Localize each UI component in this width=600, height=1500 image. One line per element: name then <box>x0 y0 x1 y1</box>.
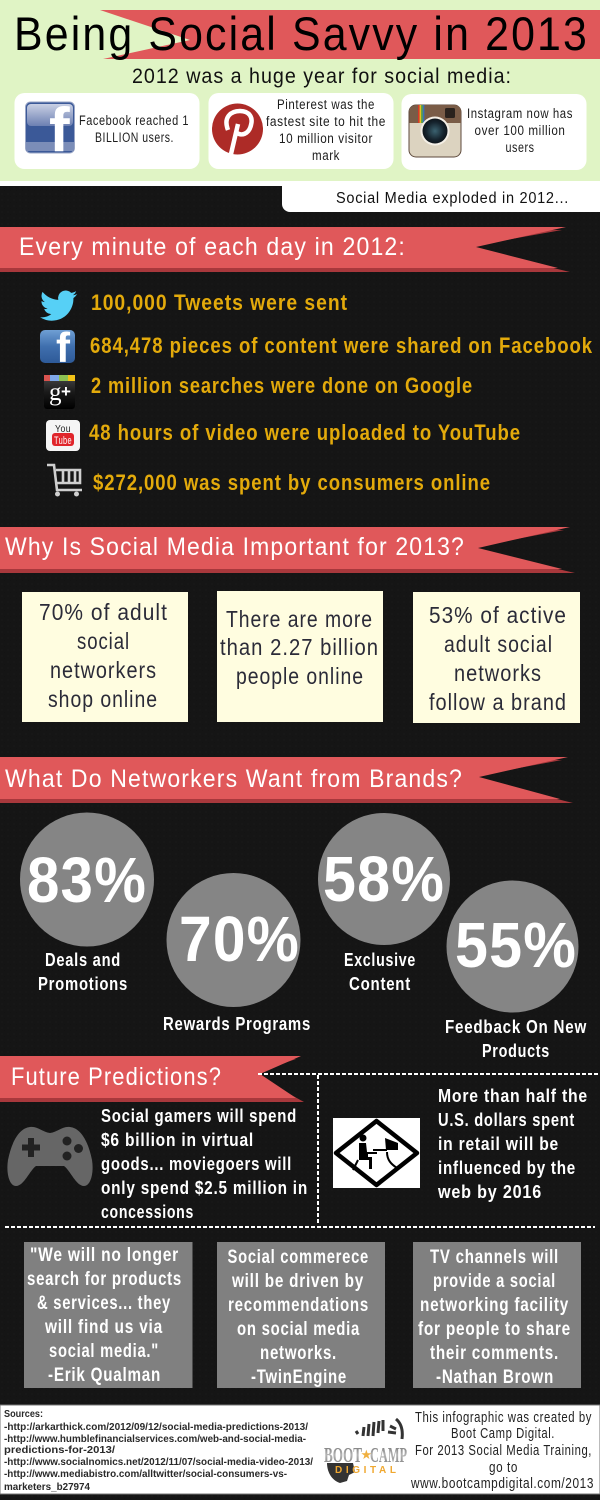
text: sources: -http://www.mediabistro.com/alltwitter/social-consumers-vs- <box>4 1469 287 1480</box>
box: follow a brand: adult social <box>444 631 553 657</box>
panel: importance boxes <box>22 591 580 723</box>
text: gamers: only spend $2.5 million in <box>101 1177 308 1198</box>
stat: tweets: 100,000 Tweets were sent <box>91 290 348 315</box>
quote: Erik Qualman: "We will no longer <box>30 1245 179 1266</box>
icon: youtube <box>46 420 80 451</box>
card: Pinterest: Pinterest was the <box>277 97 375 112</box>
text: gamers: Social gamers will spend <box>101 1105 297 1126</box>
card: Facebook: f <box>49 96 70 165</box>
logo: Boot Camp Digital: ★ <box>360 1447 372 1462</box>
title ribbon <box>100 10 600 59</box>
icon: google plus <box>44 375 75 409</box>
stat: 83% deals: Deals and <box>45 949 121 970</box>
box: follow a brand: follow a brand <box>429 689 567 715</box>
stat: 55% feedback: 55% <box>455 909 577 981</box>
card: Pinterest <box>208 93 394 169</box>
banner: Future Predictions <box>0 1056 304 1102</box>
text: sources: marketers_b27974 <box>4 1482 90 1493</box>
card: Facebook <box>14 93 200 169</box>
text: credits: go to <box>489 1460 518 1476</box>
quote: Erik Qualman: search for products <box>27 1269 182 1290</box>
logo: Boot Camp Digital: BOOT <box>324 1443 362 1467</box>
icon: twitter <box>40 290 77 321</box>
stat: 83% deals: 83% <box>27 844 147 916</box>
banner: What Do Networkers Want: What Do Networkers Want from Brands? <box>5 765 463 793</box>
stat: google: 2 million searches were done on Google <box>91 373 473 398</box>
quote: TwinEngine: Social commerece <box>228 1247 369 1268</box>
box: follow a brand: 53% of active <box>429 602 567 628</box>
text: sources: -http://www.humblefinancialservices.com/web-and-social-media- <box>4 1434 306 1445</box>
icon: google plus: + <box>61 382 71 401</box>
card: Facebook: BILLION users. <box>95 130 174 145</box>
panel: percent circles <box>20 812 587 1061</box>
quote: Nathan Brown <box>413 1242 581 1388</box>
card: Instagram: over 100 million <box>474 123 566 138</box>
quote: Erik Qualman: will find us via <box>44 1317 163 1338</box>
quote: TwinEngine: networks. <box>260 1343 337 1364</box>
text: gamers: goods... moviegoers will <box>101 1153 292 1174</box>
quote: Nathan Brown: their comments. <box>430 1343 559 1364</box>
panel: header <box>0 0 600 186</box>
text: retail: web by 2016 <box>437 1181 542 1202</box>
banner: Future Predictions: Future Predictions? <box>11 1063 222 1091</box>
stat: 58% exclusive <box>318 813 450 994</box>
panel: quotes <box>24 1242 581 1388</box>
text: retail <box>437 1085 588 1202</box>
stat: 70% rewards: 70% <box>179 903 300 975</box>
tab: Social Media exploded <box>282 181 600 212</box>
stat: 55% feedback <box>445 880 587 1061</box>
card: Instagram: Instagram now has <box>467 106 573 121</box>
stat: online spend: $272,000 was spent by consumers online <box>93 470 491 495</box>
box: shop online <box>22 592 188 722</box>
stat: 83% deals <box>20 812 154 994</box>
box: 2.27 billion online: people online <box>236 663 364 689</box>
banner: Every minute <box>0 227 570 272</box>
banner: Why Is Social Media Important: Why Is Social Media Important for 2013? <box>5 533 465 561</box>
box: 2.27 billion online <box>217 591 383 722</box>
stat: 83% deals: Promotions <box>38 973 128 994</box>
icon: computer user sign <box>333 1118 420 1188</box>
text: retail: in retail will be <box>438 1133 559 1154</box>
icon: youtube: Tube <box>54 435 72 447</box>
card: Pinterest: mark <box>312 148 340 163</box>
text: sources: -http://arkarthick.com/2012/09/12/social-media-predictions-2013/ <box>4 1422 308 1433</box>
panel: footer <box>0 1405 600 1494</box>
quote: Erik Qualman: -Erik Qualman <box>48 1365 161 1386</box>
card: Pinterest: 10 million visitor <box>279 131 373 146</box>
stat: 70% rewards: Rewards Programs <box>163 1013 311 1034</box>
quote: Nathan Brown: provide a social <box>433 1271 556 1292</box>
icon: shopping cart <box>47 465 82 496</box>
quote: Nathan Brown: networking facility <box>420 1295 569 1316</box>
panel: every minute stats <box>40 290 593 496</box>
card: Instagram: users <box>506 140 534 155</box>
logo: Boot Camp Digital <box>324 1419 407 1483</box>
text: gamers: $6 billion in virtual <box>101 1129 254 1150</box>
subtitle: 2012 was a huge year for social media: <box>132 65 512 88</box>
box: shop online: shop online <box>48 686 158 712</box>
quote: Erik Qualman: social media." <box>49 1341 159 1362</box>
icon: google plus: g <box>49 379 62 406</box>
logo: Boot Camp Digital: CAMP <box>370 1443 407 1467</box>
icon: game controller <box>7 1127 93 1186</box>
text: sources <box>4 1409 313 1493</box>
quote: Nathan Brown: TV channels will <box>430 1247 559 1268</box>
box: follow a brand: networks <box>454 660 542 686</box>
banner: What Do Networkers Want <box>0 757 573 803</box>
stat: youtube: 48 hours of video were uploaded to YouTube <box>89 420 521 445</box>
quote: Erik Qualman: & services... they <box>37 1293 171 1314</box>
text: credits: Boot Camp Digital. <box>451 1426 555 1442</box>
card: Pinterest: fastest site to hit the <box>266 114 386 129</box>
tab: Social Media exploded: Social Media exploded in 2012... <box>336 190 569 207</box>
panel: retail prediction <box>333 1085 588 1202</box>
icon: facebook <box>40 324 75 371</box>
text: sources: Sources: <box>4 1409 43 1420</box>
banner: Every minute: Every minute of each day in 2012: <box>19 233 406 261</box>
box: shop online: social <box>77 628 130 654</box>
quote: Erik Qualman <box>24 1242 192 1388</box>
banner: Why Is Social Media Important <box>0 527 575 573</box>
icon: facebook: f <box>56 324 71 371</box>
quote: TwinEngine: recommendations <box>228 1295 369 1316</box>
card: Instagram <box>402 94 586 170</box>
text: credits <box>410 1410 594 1492</box>
box: shop online: networkers <box>50 657 157 683</box>
icon: youtube: You <box>55 423 71 435</box>
stat: 58% exclusive: Exclusive <box>344 949 416 970</box>
text: gamers: concessions <box>101 1201 194 1222</box>
box: follow a brand <box>413 592 580 723</box>
quote: TwinEngine: -TwinEngine <box>251 1367 347 1388</box>
stat: 70% rewards <box>163 873 311 1034</box>
text: sources: predictions-for-2013/ <box>4 1445 115 1456</box>
text: sources: -http://www.socialnomics.net/2012/11/07/social-media-video-2013/ <box>4 1457 313 1468</box>
stat: 58% exclusive: 58% <box>323 843 445 915</box>
text: gamers <box>101 1105 308 1222</box>
stat: 55% feedback: Products <box>482 1040 550 1061</box>
card: Facebook: Facebook reached 1 <box>79 113 189 128</box>
quote: TwinEngine: on social media <box>237 1319 360 1340</box>
quote: Nathan Brown: -Nathan Brown <box>436 1367 554 1388</box>
logo: Boot Camp Digital: DIGITAL <box>335 1465 396 1476</box>
quote: TwinEngine: will be driven by <box>231 1271 364 1292</box>
box: 2.27 billion online: than 2.27 billion <box>220 634 379 660</box>
stat: 58% exclusive: Content <box>349 973 411 994</box>
panel: gamers prediction <box>7 1105 308 1222</box>
box: 2.27 billion online: There are more <box>226 606 373 632</box>
box: shop online: 70% of adult <box>39 599 168 625</box>
quote: TwinEngine <box>217 1242 385 1388</box>
